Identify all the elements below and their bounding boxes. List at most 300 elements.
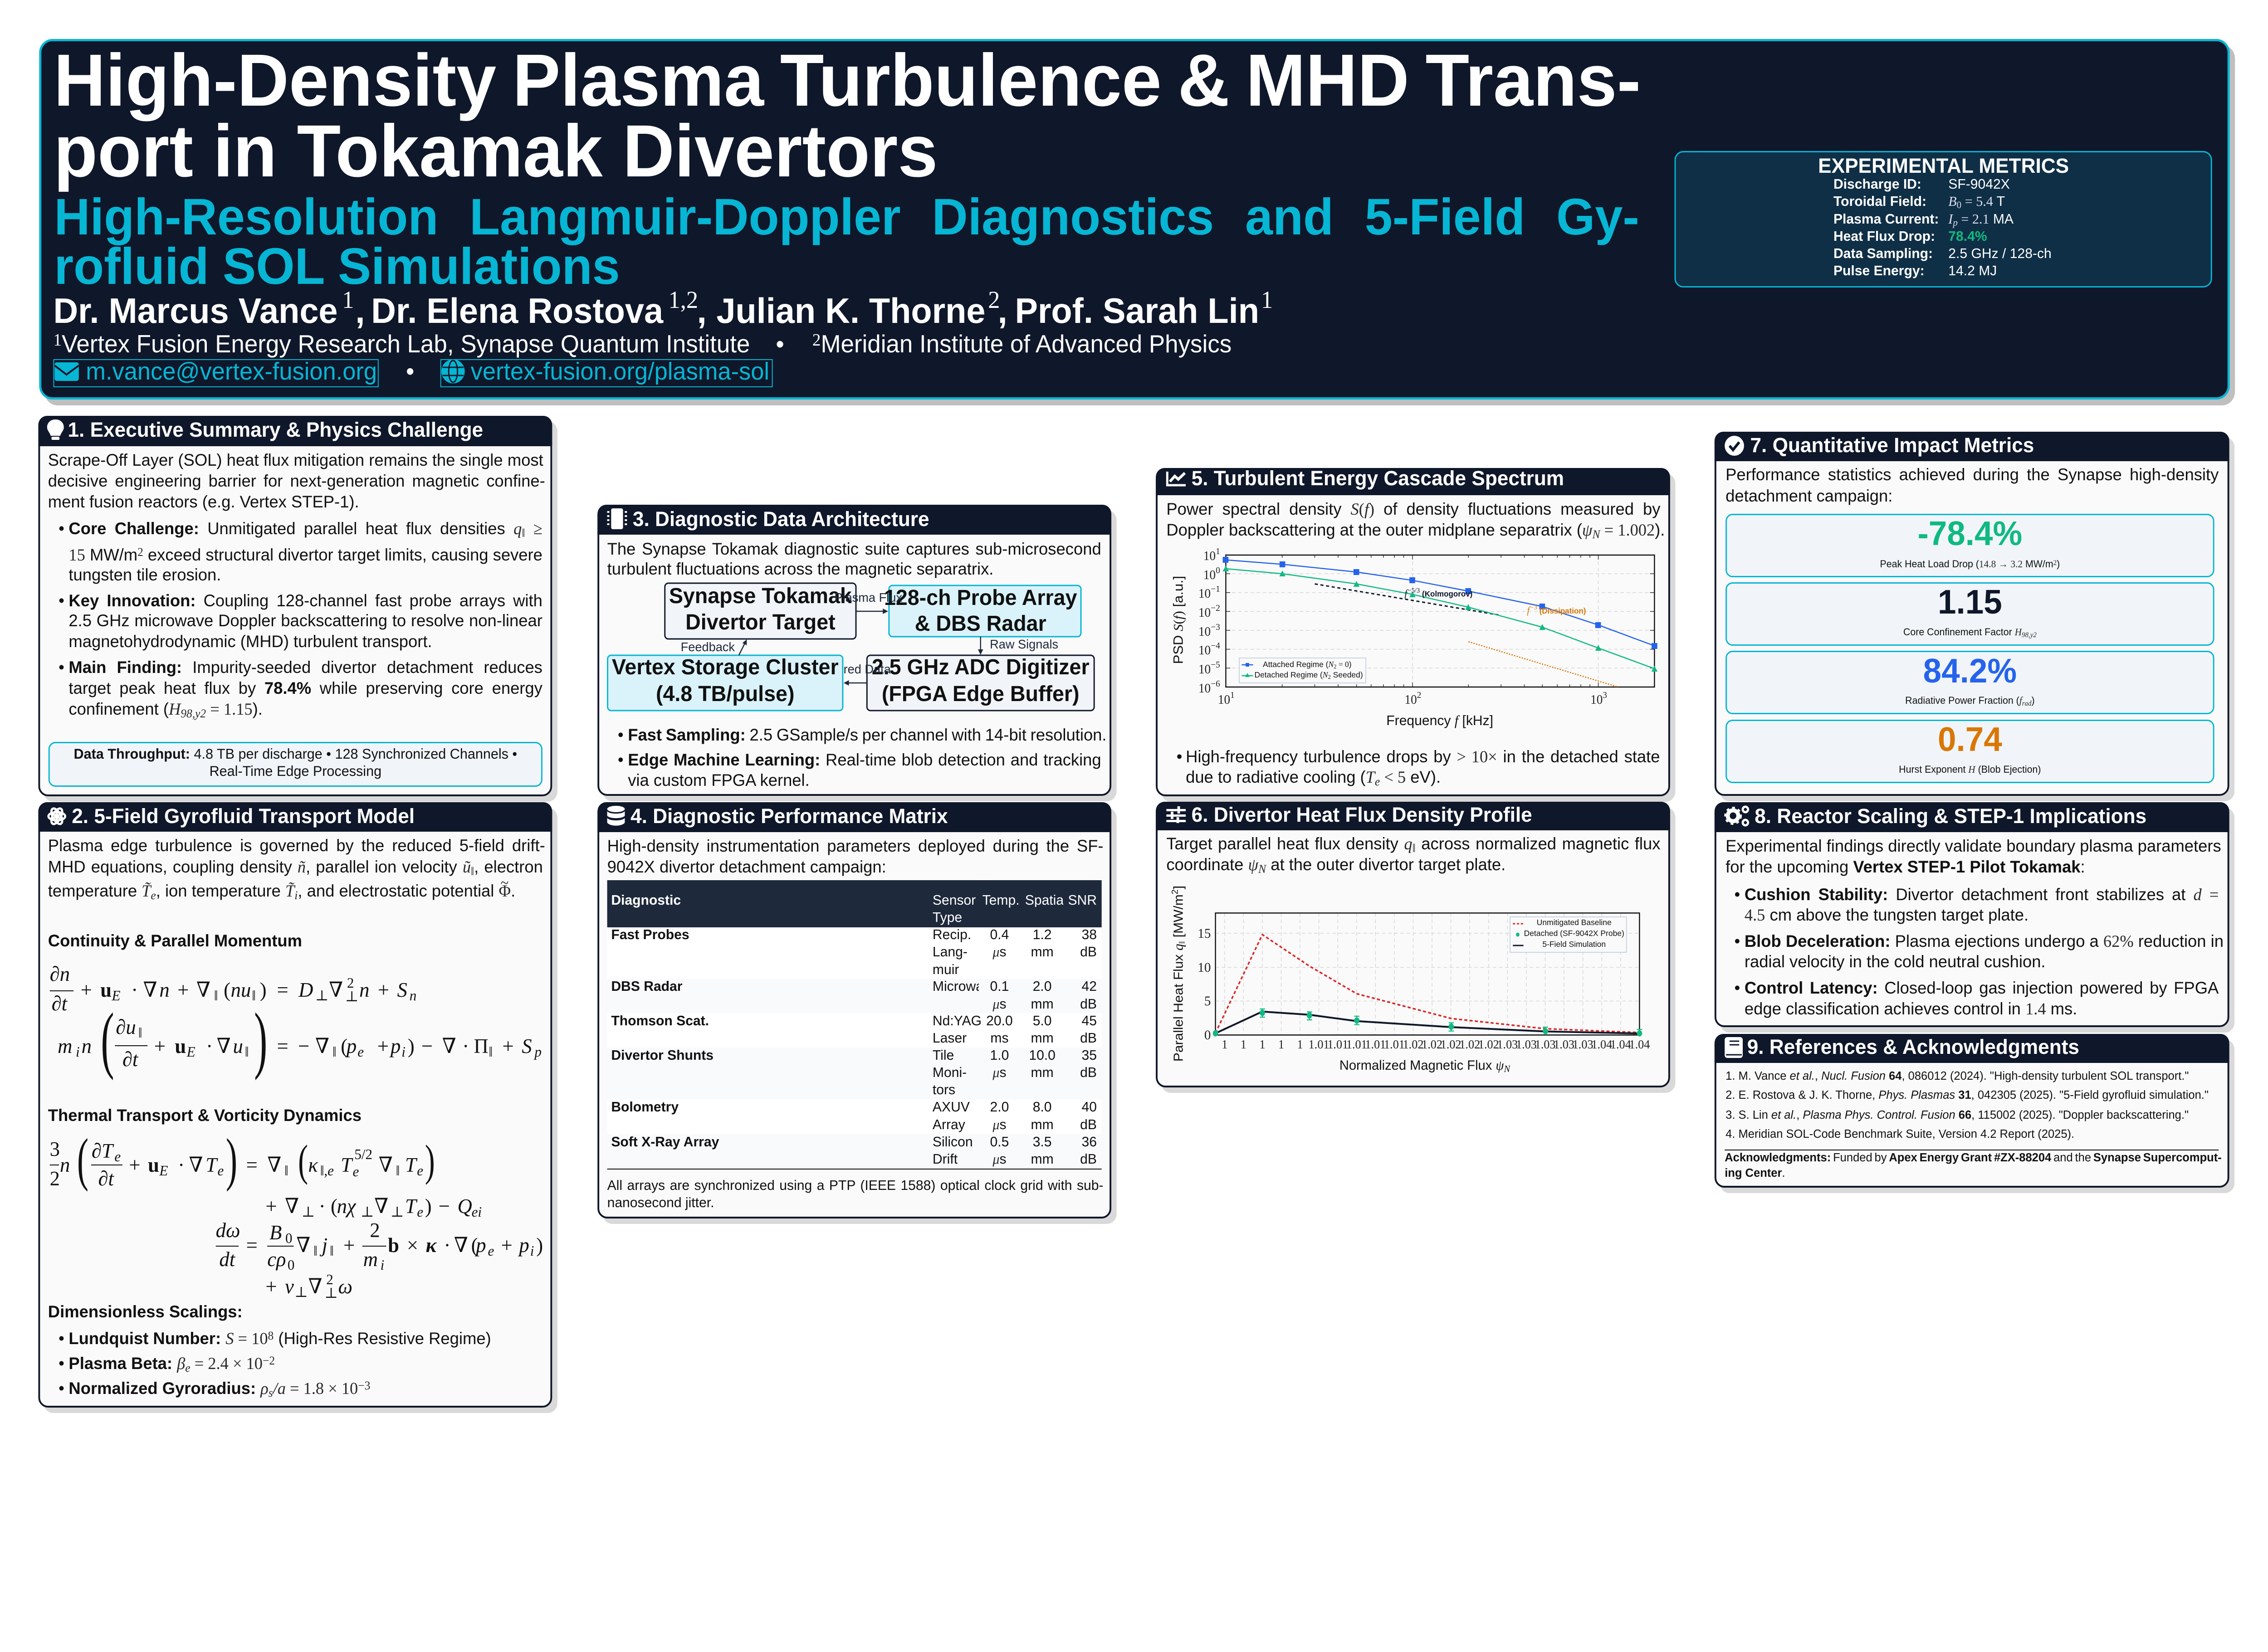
- panel: 2 gyrofluid model: p: [345, 1034, 357, 1057]
- scaling list: •: [59, 1379, 64, 1398]
- email link: m.vance@vertex-fusion.org: [86, 358, 377, 385]
- subheading: continuity: Continuity & Parallel Momentum: [48, 931, 302, 950]
- panel: 2 gyrofluid model: n: [159, 978, 170, 1001]
- x axis label: N: [1503, 1064, 1510, 1074]
- series: unmitigated baseline: [1216, 935, 1639, 1033]
- panel: 2 gyrofluid model: i: [401, 1044, 406, 1060]
- panel: 2 gyrofluid model: Π: [474, 1034, 489, 1057]
- panel: 2 gyrofluid model: ×: [407, 1233, 418, 1257]
- table: 0.1: [990, 978, 1009, 994]
- metric rows: Discharge ID:: [1833, 176, 1921, 192]
- x tick labels: 1.01: [1346, 1038, 1367, 1051]
- x tick labels: 1.04: [1591, 1038, 1612, 1051]
- panel: 2 gyrofluid model: (: [77, 1127, 88, 1192]
- panel: 2 gyrofluid model: ∂n: [50, 962, 70, 985]
- panel: 2 gyrofluid model: ): [536, 1233, 543, 1257]
- x tick labels: 1.03: [1573, 1038, 1593, 1051]
- row: bolometry: Bolometry: [611, 1099, 679, 1115]
- table: mm: [1031, 1151, 1054, 1167]
- x tick labels: 1.02: [1403, 1038, 1423, 1051]
- panel: 2 gyrofluid model: ·: [131, 978, 138, 1001]
- panel: 2 gyrofluid model: ∇: [315, 1034, 329, 1057]
- bullet: high-frequency turbulence: High-frequency turbulence drops by > 10× in the detached state: [1186, 747, 1660, 766]
- panel: 2 gyrofluid model: +: [378, 978, 389, 1001]
- panel heading 7: [1715, 432, 2229, 461]
- panel: 5 energy cascade: [1156, 468, 1670, 796]
- y tick labels: −4: [1211, 641, 1220, 651]
- y tick labels: 10: [1198, 960, 1211, 975]
- panel: 2 gyrofluid model: T: [405, 1194, 418, 1218]
- panel heading 8: [1715, 802, 2229, 832]
- row: dbs radar: DBS Radar: [611, 978, 683, 994]
- panel: 2 gyrofluid model: +: [343, 1233, 355, 1257]
- panel heading 8: 8. Reactor Scaling & STEP-1 Implications: [1755, 804, 2146, 828]
- kolmogorov reference line: [1315, 584, 1501, 615]
- bullet list: •: [1735, 885, 1740, 904]
- metric rows: Data Sampling:: [1833, 245, 1933, 261]
- panel: 2 gyrofluid model: ‖: [138, 1025, 142, 1041]
- row: soft x-ray array: Soft X-Ray Array: [611, 1134, 719, 1150]
- table: 8.0: [1033, 1099, 1052, 1115]
- panel: 2 gyrofluid model: −: [439, 1194, 450, 1218]
- panel: 2 gyrofluid model: n: [82, 1034, 92, 1057]
- experimental metrics box: [1675, 151, 2212, 288]
- table: dB: [1080, 1030, 1097, 1046]
- panel: 2 gyrofluid model: T: [405, 1153, 418, 1176]
- panel heading 4: [597, 802, 1111, 832]
- table: 36: [1082, 1134, 1097, 1150]
- series: attached regime: [1223, 557, 1657, 649]
- panel: 3 diagnostic architecture: [597, 505, 1111, 796]
- table header: Type: [933, 909, 962, 925]
- intro text: 9042X divertor detachment campaign:: [607, 857, 886, 876]
- scaling list: Normalized Gyroradius: ρs/a = 1.8 × 10−3: [68, 1379, 370, 1399]
- acknowledgments: Acknowledgments: Funded by Apex Energy Grant #ZX-88204 and the Synapse Supercomput-: [1725, 1150, 2222, 1164]
- panel: 7 impact metrics: [1715, 432, 2229, 796]
- box: digitizer: [867, 655, 1094, 711]
- scaling list: [57, 1329, 498, 1401]
- panel: 2 gyrofluid model: T: [205, 1153, 218, 1176]
- table: Silicon: [933, 1134, 973, 1150]
- table header: Diagnostic: [611, 892, 681, 908]
- panel: 2 gyrofluid model: (: [298, 1136, 308, 1185]
- box: tokamak: Synapse Tokamak: [669, 584, 852, 608]
- panel: 2 gyrofluid model: ⊥: [294, 1284, 308, 1300]
- legend: 2: [1334, 663, 1336, 670]
- table note: [607, 1177, 1104, 1213]
- bullet list: Blob Deceleration: Plasma ejections undergo a 62% reduction in: [1745, 931, 2224, 951]
- panel: 2 gyrofluid model: ∇: [308, 1275, 323, 1298]
- table: 0.5: [990, 1134, 1009, 1150]
- x tick labels: 10: [1590, 692, 1603, 707]
- authors: [53, 295, 1275, 333]
- panel: 2 gyrofluid model: 2: [347, 975, 354, 991]
- x tick labels: 1.01: [1327, 1038, 1348, 1051]
- panel: 2 gyrofluid model: ): [260, 978, 267, 1001]
- panel: 2 gyrofluid model: +: [154, 1034, 166, 1057]
- table: dB: [1080, 944, 1097, 960]
- affiliation 2: 2Meridian Institute of Advanced Physics: [812, 330, 1232, 358]
- panel: 2 gyrofluid model: D: [298, 978, 313, 1001]
- panel: 2 gyrofluid model: B: [269, 1221, 282, 1244]
- table: 2.0: [990, 1099, 1009, 1115]
- bullet list: •: [618, 750, 624, 769]
- bullet list: Fast Sampling: 2.5 GSample/s per channel with 14-bit resolution.: [628, 725, 1107, 744]
- panel: 2 gyrofluid model: p: [474, 1233, 486, 1257]
- intro text: High-density instrumentation parameters deployed during the SF-: [607, 836, 1104, 855]
- panel: 2 gyrofluid model: ∂T: [92, 1139, 114, 1162]
- table header: [607, 880, 1102, 927]
- panel heading 9: 9. References & Acknowledgments: [1747, 1035, 2079, 1058]
- box: probe array: [884, 585, 1081, 637]
- metric card: confinement factor: Core Confinement Factor H98,y2: [1903, 626, 2037, 639]
- bullet list: radial velocity in the cold neutral cushion.: [1745, 952, 2046, 971]
- x tick labels: 1: [1241, 1038, 1246, 1051]
- panel: 2 gyrofluid model: 3: [50, 1137, 60, 1160]
- legend: ): [1349, 660, 1352, 669]
- panel: 2 gyrofluid model: ‖: [489, 1044, 493, 1060]
- bullet: high-frequency turbulence: [1176, 748, 1662, 789]
- affiliation 1: 1Vertex Fusion Energy Research Lab, Synapse Quantum Institute: [53, 330, 750, 358]
- panel: 2 gyrofluid model: S: [522, 1034, 532, 1057]
- panel: 2 gyrofluid model: ∇: [267, 1153, 281, 1176]
- panel: 2 gyrofluid model: 0: [285, 1230, 293, 1246]
- bullet list: tungsten tile erosion.: [68, 565, 221, 584]
- panel: 2 gyrofluid model: ‖: [396, 1163, 400, 1179]
- x tick labels: 10: [1218, 692, 1230, 707]
- panel: 2 gyrofluid model: +: [265, 1275, 277, 1298]
- panel: 2 gyrofluid model: ∇: [454, 1233, 468, 1257]
- y tick labels: −6: [1211, 679, 1220, 689]
- x tick labels: [1222, 1038, 1650, 1051]
- panel: 2 gyrofluid model: ‖: [313, 1243, 318, 1259]
- panel heading 2: 2. 5-Field Gyrofluid Transport Model: [72, 804, 415, 828]
- table: [607, 880, 1102, 1170]
- bullet list: Main Finding: Impurity-seeded divertor detachment reduces: [68, 658, 543, 677]
- bullet list: confinement (H98,y2 = 1.15).: [68, 699, 263, 720]
- y tick labels: 10: [1198, 605, 1211, 619]
- panel: 2 gyrofluid model: e: [417, 1204, 423, 1220]
- title: [54, 50, 1643, 186]
- bullet list: 15 MW/m2 exceed structural divertor target limits, causing severe: [68, 545, 543, 565]
- box: tokamak: [665, 583, 856, 639]
- panel: 2 gyrofluid model: ν: [285, 1275, 294, 1298]
- panel: 6 heat flux profile: [1156, 802, 1670, 1087]
- table: Lang-: [933, 944, 968, 960]
- intro text: [1725, 466, 2219, 507]
- panel: 2 gyrofluid model: ⊥: [302, 1204, 315, 1220]
- table header: SNR: [1068, 892, 1097, 908]
- x tick labels: 1.03: [1516, 1038, 1537, 1051]
- panel: 2 gyrofluid model: (: [471, 1233, 478, 1257]
- panel: 1 executive summary: [38, 416, 552, 796]
- panel: 2 gyrofluid model: ⊥: [361, 1204, 374, 1220]
- separator bullet: •: [406, 358, 414, 385]
- panel: 2 gyrofluid model: +: [265, 1194, 277, 1218]
- metric card: heat load drop: [1725, 514, 2214, 577]
- legend: Detached Regime (N: [1254, 670, 1328, 679]
- metric card: confinement factor: 1.15: [1938, 583, 2002, 621]
- panel: 2 gyrofluid model: −: [421, 1034, 433, 1057]
- x tick labels: 1.01: [1384, 1038, 1405, 1051]
- table header: Sensor: [933, 892, 976, 908]
- panel: 2 gyrofluid model: n: [60, 1153, 70, 1176]
- arrow: raw signals: Raw Signals: [990, 637, 1058, 651]
- metric card: radiative fraction: [1725, 651, 2214, 714]
- y tick labels: 15: [1198, 926, 1211, 941]
- metric rows: Toroidal Field:: [1833, 193, 1926, 209]
- bullet list: 4.5 cm above the tungsten target plate.: [1745, 905, 2028, 925]
- y tick labels: 0: [1216, 565, 1220, 575]
- table: tors: [933, 1082, 955, 1097]
- bullet list: •: [59, 658, 64, 677]
- panel: 2 gyrofluid model: i: [381, 1257, 384, 1273]
- panel: 2 gyrofluid model: ei: [472, 1204, 482, 1220]
- reference list: 3. S. Lin et al., Plasma Phys. Control. Fusion 66, 115002 (2025). "Doppler backscattering.": [1725, 1108, 2189, 1121]
- legend: Detached (SF-9042X Probe): [1524, 929, 1624, 938]
- legend: Unmitigated Baseline: [1537, 918, 1612, 927]
- authors: 1: [342, 286, 354, 313]
- bullet list: •: [59, 519, 64, 538]
- panel: 2 gyrofluid model: κ: [308, 1153, 318, 1176]
- table: μs: [992, 996, 1007, 1012]
- panel heading 9: [1715, 1034, 2229, 1063]
- panel: 2 gyrofluid model: ‖,e: [320, 1163, 334, 1179]
- panel: 2 gyrofluid model: =: [246, 1233, 258, 1257]
- table: μs: [992, 1064, 1007, 1080]
- table: 38: [1082, 926, 1097, 942]
- metric card: heat load drop: -78.4%: [1918, 514, 2022, 552]
- panel: 9 references: [1715, 1034, 2229, 1188]
- table: mm: [1031, 1064, 1054, 1080]
- legend: [1510, 917, 1627, 952]
- y tick labels: −3: [1211, 622, 1220, 632]
- panel: 2 gyrofluid model: dt: [219, 1248, 236, 1271]
- x tick labels: 1.03: [1554, 1038, 1574, 1051]
- annotation: kolmogorov: f: [1405, 588, 1408, 599]
- bullet list: [1735, 884, 2219, 1020]
- panel heading 3: 3. Diagnostic Data Architecture: [633, 507, 929, 531]
- bullet list: Control Latency: Closed-loop gas injection powered by FPGA: [1745, 978, 2219, 997]
- subtitle: [54, 193, 1639, 297]
- intro text: Plasma edge turbulence is governed by the reduced 5-field drift-: [48, 836, 545, 855]
- y axis label: ]: [1171, 886, 1186, 889]
- panel: 2 gyrofluid model: 5/2: [354, 1146, 372, 1162]
- panel heading 1: 1. Executive Summary & Physics Challenge: [68, 418, 483, 441]
- box: storage cluster: [608, 655, 843, 711]
- series: 5-field simulation: [1216, 1012, 1639, 1033]
- intro text: for the upcoming Vertex STEP-1 Pilot Tokamak:: [1725, 857, 2085, 876]
- panel: 2 gyrofluid model: +: [501, 1233, 513, 1257]
- panel: 2 gyrofluid model: p: [389, 1034, 401, 1057]
- panel: 2 gyrofluid model: ·: [206, 1034, 213, 1057]
- panel: 2 gyrofluid model: ): [408, 1034, 415, 1057]
- bullet list: [616, 726, 1105, 791]
- panel: 2 gyrofluid model: p: [518, 1233, 529, 1257]
- y tick labels: 10: [1198, 662, 1211, 676]
- x tick labels: 1.02: [1422, 1038, 1442, 1051]
- metric card: heat load drop: Peak Heat Load Drop (14.8 → 3.2 MW/m2): [1880, 558, 2060, 570]
- metric rows: 2.5 GHz / 128-ch: [1948, 245, 2052, 261]
- table: dB: [1080, 1116, 1097, 1132]
- box: probe array: 128-ch Probe Array: [884, 585, 1077, 610]
- x tick labels: 1.03: [1535, 1038, 1555, 1051]
- authors: ,: [697, 291, 707, 331]
- reference list: 4. Meridian SOL-Code Benchmark Suite, Version 4.2 Report (2025).: [1725, 1127, 2074, 1140]
- panel: 2 gyrofluid model: (: [224, 978, 230, 1001]
- legend: = 0: [1336, 660, 1349, 669]
- panel: 2 gyrofluid model: (: [341, 1034, 347, 1057]
- subtitle: High-Resolution Langmuir-Doppler Diagnostics and 5-Field Gy-: [54, 188, 1639, 245]
- intro text: turbulent fluctuations across the magnetic separatrix.: [607, 559, 993, 578]
- table: Nd:YAG: [933, 1013, 982, 1028]
- x tick labels: 1.02: [1441, 1038, 1461, 1051]
- panel: 2 gyrofluid model: u: [175, 1034, 186, 1057]
- annotation: dissipation: (Dissipation): [1540, 606, 1586, 615]
- panel: 2 gyrofluid model: ‖: [214, 988, 218, 1004]
- y tick labels: −5: [1211, 660, 1220, 670]
- legend: 5-Field Simulation: [1542, 940, 1606, 949]
- table: 2.0: [1033, 978, 1052, 994]
- bullet list: [57, 519, 543, 721]
- panel: 2 gyrofluid model: p: [533, 1044, 542, 1060]
- legend: Attached Regime (N: [1263, 660, 1334, 669]
- metric card: hurst exponent: [1725, 720, 2214, 783]
- y axis label: ‖: [1177, 941, 1187, 944]
- panel: 2 gyrofluid model: ⊥: [345, 989, 358, 1004]
- panel: 2 gyrofluid model: 2: [50, 1167, 60, 1190]
- scaling list: •: [59, 1329, 64, 1348]
- bullet list: •: [59, 591, 64, 610]
- table: Moni-: [933, 1064, 967, 1080]
- panel: 2 gyrofluid model: ∂t: [52, 992, 68, 1015]
- x tick labels: 1.02: [1459, 1038, 1480, 1051]
- website link: vertex-fusion.org/plasma-sol: [471, 358, 769, 385]
- title: High-Density Plasma Turbulence & MHD Trans-: [54, 39, 1641, 122]
- annotation: dissipation: −3: [1530, 604, 1537, 611]
- title: port in Tokamak Divertors: [54, 109, 938, 192]
- callout: data throughput: [49, 742, 543, 787]
- bullet list: Core Challenge: Unmitigated parallel heat flux densities q‖ ≥: [68, 519, 543, 540]
- panel heading 5: [1156, 468, 1670, 495]
- authors: 1: [1261, 286, 1273, 313]
- acknowledgments: ing Center.: [1725, 1166, 1785, 1179]
- panel: 2 gyrofluid model: (: [331, 1194, 337, 1218]
- row: divertor shunts: Divertor Shunts: [611, 1047, 714, 1063]
- panel: 2 gyrofluid model: Q: [458, 1194, 472, 1218]
- authors: Julian K. Thorne: [716, 291, 985, 331]
- x tick labels: 1.01: [1309, 1038, 1330, 1051]
- table note: All arrays are synchronized using a PTP (IEEE 1588) optical clock grid with sub-: [607, 1177, 1104, 1193]
- panel: 2 gyrofluid model: ∇: [379, 1153, 393, 1176]
- acknowledgments: [1725, 1151, 2221, 1183]
- x axis label: Normalized Magnetic Flux ψ: [1339, 1058, 1504, 1073]
- table: mm: [1031, 1116, 1054, 1132]
- x tick labels: 1.03: [1497, 1038, 1518, 1051]
- panel: 2 gyrofluid model: cρ: [267, 1248, 286, 1271]
- panel: 2 gyrofluid model: ‖: [252, 988, 256, 1004]
- callout: data throughput: Real-Time Edge Processing: [210, 763, 381, 779]
- panel: 2 gyrofluid model: ∂u: [116, 1015, 136, 1038]
- bullet list: Edge Machine Learning: Real-time blob detection and tracking: [628, 750, 1101, 769]
- metric rows: [1833, 177, 2063, 281]
- table: 40: [1082, 1099, 1097, 1115]
- panel: 2 gyrofluid model: ∇: [217, 1034, 231, 1057]
- panel: 2 gyrofluid model: +: [377, 1034, 389, 1057]
- table: Array: [933, 1116, 965, 1132]
- y tick labels: 10: [1198, 681, 1211, 695]
- panel: 2 gyrofluid model: ): [254, 998, 267, 1081]
- panel: 2 gyrofluid model: ω: [338, 1275, 352, 1298]
- arrow: filtered data: Filtered Data: [820, 662, 891, 676]
- panel: 2 gyrofluid model: ∂t: [98, 1167, 114, 1190]
- bullet list: •: [1735, 931, 1740, 950]
- metric card: hurst exponent: Hurst Exponent H (Blob Ejection): [1899, 764, 2041, 775]
- x tick labels: [1218, 690, 1607, 707]
- y tick labels: [1198, 926, 1211, 1043]
- authors: Dr. Marcus Vance: [53, 291, 338, 331]
- intro text: Doppler backscattering at the outer midplane separatrix (ψN = 1.002).: [1166, 520, 1665, 541]
- y tick labels: 10: [1198, 643, 1211, 657]
- panel: 2 gyrofluid model: ·: [319, 1194, 326, 1218]
- panel: 8 reactor scaling: [1715, 802, 2229, 1027]
- panel: 4 performance matrix: [597, 802, 1111, 1218]
- panel: 2 gyrofluid model: ∇: [196, 978, 210, 1001]
- panel: 2 gyrofluid model: ∇: [285, 1194, 299, 1218]
- reference list: 2. E. Rostova & J. K. Thorne, Phys. Plasmas 31, 042305 (2025). "5-Field gyrofluid simulation.": [1725, 1088, 2209, 1101]
- panel: 2 gyrofluid model: m: [363, 1248, 378, 1271]
- annotation: kolmogorov: (Kolmogorov): [1422, 589, 1472, 599]
- panel: 2 gyrofluid model: T: [341, 1153, 353, 1176]
- table: 1.2: [1033, 926, 1052, 942]
- table: AXUV: [933, 1099, 970, 1115]
- intro text: Scrape-Off Layer (SOL) heat flux mitigation remains the single most: [48, 450, 543, 469]
- panel: 2 gyrofluid model: ·: [444, 1233, 450, 1257]
- authors: Dr. Elena Rostova: [371, 291, 663, 331]
- panel: 2 gyrofluid model: e: [353, 1164, 359, 1179]
- bullet list: magnetohydrodynamic (MHD) turbulent transport.: [68, 632, 432, 651]
- metric rows: B0 = 5.4 T: [1948, 193, 2005, 210]
- intro text: coordinate ψN at the outer divertor target plate.: [1166, 855, 1505, 876]
- panel: 2 gyrofluid model: =: [277, 1034, 288, 1057]
- panel: 2 gyrofluid model: S: [397, 978, 407, 1001]
- table: dB: [1080, 1151, 1097, 1167]
- y tick labels: 10: [1198, 586, 1211, 600]
- panel: 2 gyrofluid model: ): [425, 1194, 432, 1218]
- reference list: [1725, 1068, 2210, 1143]
- y tick labels: 10: [1203, 549, 1216, 563]
- authors: ,: [355, 291, 365, 331]
- panel: 2 gyrofluid model: m: [58, 1034, 72, 1057]
- panel: 2 gyrofluid model: e: [114, 1149, 121, 1165]
- panel heading 1: [38, 416, 552, 446]
- panel: 2 gyrofluid model: E: [186, 1044, 196, 1060]
- row: fast probes: Fast Probes: [611, 926, 689, 942]
- y axis label: [MW/m: [1171, 894, 1186, 941]
- table: 45: [1082, 1013, 1097, 1028]
- table: 10.0: [1029, 1047, 1056, 1063]
- panel: 2 gyrofluid model: ): [425, 1136, 435, 1185]
- dissipation reference line: [1468, 642, 1618, 687]
- panel: 2 gyrofluid model: ⊥: [324, 1285, 338, 1301]
- panel: 2 gyrofluid model: ∂t: [122, 1048, 139, 1071]
- x tick labels: 1: [1259, 1038, 1266, 1051]
- separator bullet: •: [776, 331, 784, 358]
- table: Recip.: [933, 926, 971, 942]
- intro text: [1725, 837, 2219, 878]
- panel: 2 gyrofluid model: +: [503, 1034, 514, 1057]
- panel: 2 gyrofluid model: i: [530, 1243, 534, 1259]
